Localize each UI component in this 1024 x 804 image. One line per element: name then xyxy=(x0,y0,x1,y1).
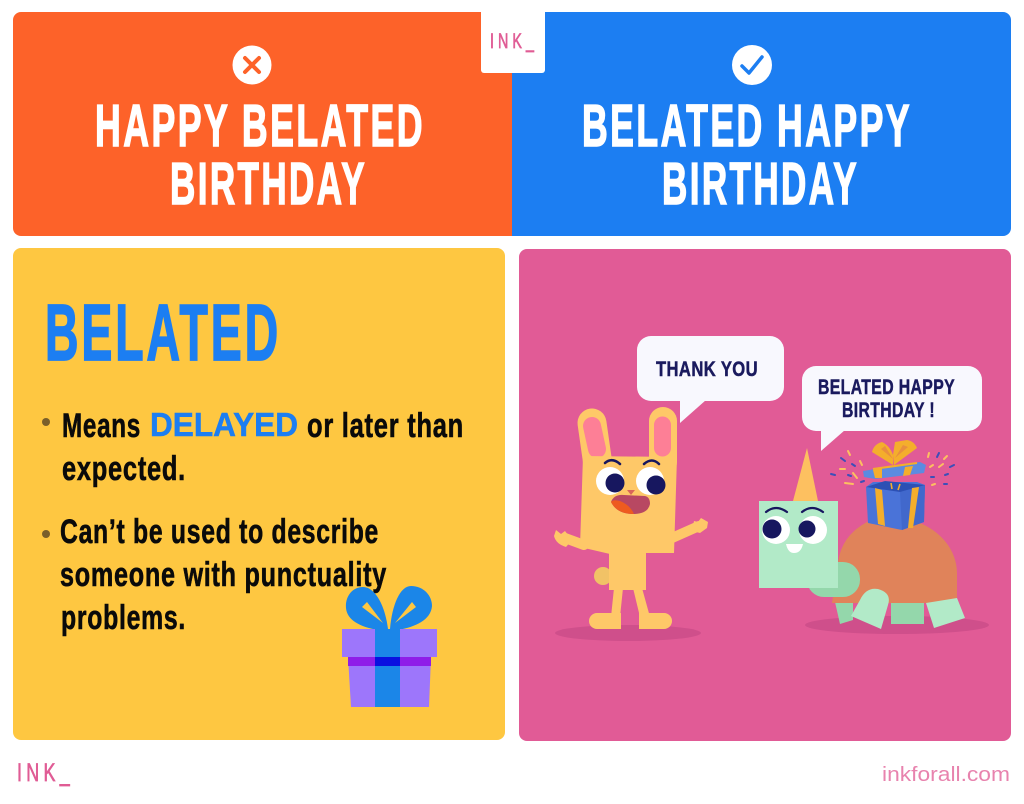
bullet: usage xyxy=(42,513,387,637)
panel: definition xyxy=(13,248,505,740)
panel: incorrect phrase xyxy=(13,12,512,236)
bullet: meaning: or later than xyxy=(307,407,464,445)
logo tab xyxy=(481,12,545,73)
logo tab: INK_ xyxy=(490,30,538,53)
footer url: inkforall.com xyxy=(882,764,1010,786)
confetti xyxy=(831,451,954,485)
speech bubble: belated happy birthday xyxy=(802,366,982,451)
bullet: meaning xyxy=(42,406,464,488)
heading: happy belated birthday xyxy=(95,93,425,217)
speech bubble: thank you xyxy=(637,336,784,423)
heading: belated happy birthday xyxy=(582,93,912,217)
bullet: usage: problems. xyxy=(61,599,186,637)
bullet: usage: someone with punctuality xyxy=(60,556,387,594)
bullet: meaning: expected. xyxy=(62,450,186,488)
footer logo: INK_ xyxy=(17,759,74,787)
character: rabbit xyxy=(554,421,708,641)
heading: belated happy birthday: BIRTHDAY xyxy=(662,151,859,217)
heading: happy belated birthday: BIRTHDAY xyxy=(170,151,367,217)
panel: correct phrase xyxy=(512,12,1011,236)
icon: gift box xyxy=(342,586,437,707)
speech bubble: thank you: THANK YOU xyxy=(656,358,758,381)
character: turtle with gift xyxy=(759,440,989,634)
icon: open gift xyxy=(831,440,954,530)
bullet: meaning: DELAYED xyxy=(150,406,298,443)
icon: check mark xyxy=(732,45,772,85)
speech bubble: belated happy birthday: BIRTHDAY ! xyxy=(842,399,935,422)
heading: belated: BELATED xyxy=(45,288,281,377)
heading: happy belated birthday: HAPPY BELATED xyxy=(95,93,425,159)
speech bubble: belated happy birthday: BELATED HAPPY xyxy=(818,376,955,399)
icon: cross xyxy=(232,46,272,84)
bullet: meaning: Means xyxy=(62,407,141,445)
panel: illustration xyxy=(519,249,1011,741)
bullet: usage: Can’t be used to describe xyxy=(60,513,379,551)
